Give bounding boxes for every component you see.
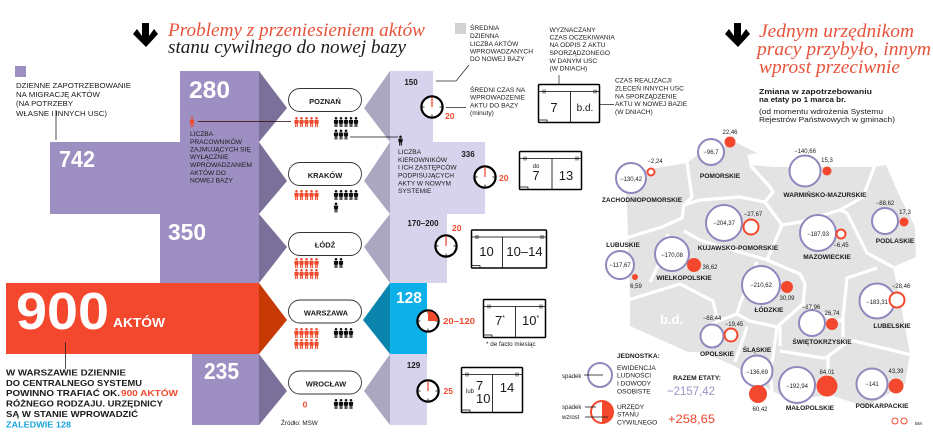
labels: regions: ŚLĄSKIE — [743, 345, 772, 354]
annotation: managers count — [350, 136, 457, 195]
legend: daily average entries: WPROWADZANYCH — [470, 48, 533, 56]
calendar: Łódź: 10 — [479, 244, 494, 259]
labels: regions: POMORSKIE — [700, 173, 741, 180]
panel: blue Warsaw block — [363, 283, 427, 354]
annotation: managers count: AKTY W NOWYM — [398, 180, 451, 188]
value: 280: 280 — [189, 77, 230, 104]
values: map numbers: 15,3 — [821, 158, 833, 164]
labels: regions: OPOLSKIE — [700, 351, 735, 358]
legend: map units: EWIDENCJA — [617, 365, 656, 372]
credits — [892, 418, 922, 426]
row: Kraków: 20 — [499, 173, 509, 183]
title: one clerk — [755, 21, 931, 78]
callout: Warsaw text: ZALEDWIE 128 — [6, 420, 71, 430]
values: map numbers: 36,62 — [702, 265, 718, 271]
callout: Warsaw text: 900 AKTÓW — [121, 387, 178, 398]
legend: map units: JEDNOSTKA: — [617, 353, 660, 360]
source: Źródło: MSW — [281, 418, 318, 427]
annotation: number of staff: WYŁĄCZNIE — [190, 154, 229, 161]
calendar: Poznań — [538, 84, 600, 122]
legend: daily average entries: LICZBA AKTÓW — [470, 39, 519, 48]
values: map numbers: −2,24 — [647, 159, 663, 165]
value: 350: 350 — [168, 219, 206, 245]
legend: daily average entries: DZIENNA — [470, 33, 500, 40]
legend: completion time — [593, 78, 688, 116]
subtitle: staffing change: Zmiana w zapotrzebowaniu — [759, 87, 872, 96]
legend: completion time: ZLECEŃ INNYCH USC — [615, 84, 684, 92]
panel: left purple demand blocks — [50, 71, 287, 425]
icon: down arrow right — [725, 23, 750, 47]
panel: right lilac entry blocks — [364, 71, 485, 425]
totals — [667, 375, 721, 426]
values: map numbers: 43,39 — [888, 369, 904, 375]
calendar: Wrocław: 7 — [476, 378, 483, 393]
legend: waiting time: NA ODPIS Z AKTU — [550, 42, 606, 49]
legend: daily demand: DZIENNE ZAPOTRZEBOWANIE — [16, 83, 131, 90]
legend: daily demand: (NA POTRZEBY — [16, 101, 73, 108]
values: map numbers: −170,08 — [661, 253, 684, 259]
values: map numbers: −117,67 — [609, 263, 631, 269]
value: 742: 742 — [59, 146, 95, 172]
totals: +258,65 — [668, 412, 715, 426]
labels: regions: MAŁOPOLSKIE — [786, 405, 835, 412]
panel: red Warsaw block: 900 — [16, 283, 109, 341]
row: Poznań: POZNAŃ — [309, 97, 341, 106]
calendar: Wrocław: lub — [466, 389, 475, 395]
callout: Warsaw text: RÓŻNEGO RODZAJU. URZĘDNICY — [6, 398, 163, 408]
values: map numbers: −183,31 — [866, 300, 889, 306]
calendar: Wrocław: 14 — [500, 380, 514, 395]
calendar: Wrocław: 10 — [476, 391, 490, 406]
callout: Warsaw text: DO CENTRALNEGO SYSTEMU — [6, 378, 142, 388]
values: map numbers: −68,44 — [703, 316, 722, 322]
bubbles: registry offices rings — [648, 168, 904, 342]
annotation: number of staff: LICZBA — [190, 131, 214, 138]
labels: regions: ŁÓDZKIE — [755, 305, 784, 314]
legend: map units: STANU — [617, 412, 639, 418]
calendar: Warszawa: 7 — [495, 313, 502, 328]
calendar: Warszawa — [484, 300, 546, 348]
legend: average entry time: WPROWADZENIE — [470, 94, 526, 102]
values: map numbers: −140,66 — [794, 149, 817, 155]
credits: BM — [915, 421, 922, 426]
labels: regions: ZACHODNIOPOMORSKIE — [602, 197, 683, 204]
calendar: Kraków: do — [533, 164, 540, 170]
title: one clerk: Jednym urzędnikom — [759, 21, 914, 42]
title: problems — [167, 20, 425, 58]
legend: waiting time: (W DNIACH) — [550, 66, 587, 72]
title: one clerk: wprost przeciwnie — [759, 57, 900, 78]
bubbles: registry offices filled — [632, 136, 908, 403]
labels: regions — [602, 173, 915, 412]
calendar: Warszawa: * — [536, 315, 539, 322]
annotation: number of staff — [190, 117, 291, 184]
legend: daily average entries: DO NOWEJ BAZY — [470, 56, 525, 63]
row: Wrocław — [288, 361, 453, 410]
legend: map units: CYWILNEGO — [617, 420, 657, 426]
values: map numbers: −88,62 — [876, 201, 895, 207]
values: map numbers: 60,42 — [752, 407, 768, 413]
values: map numbers: 30,09 — [779, 296, 795, 302]
legend: daily average entries — [455, 23, 533, 63]
callout: Warsaw text: W WARSZAWIE DZIENNIE — [6, 368, 126, 378]
row: Poznań: 20 — [445, 111, 455, 121]
subtitle: staffing change — [759, 87, 895, 124]
legend: average entry time: AKTU DO BAZY — [470, 102, 519, 110]
row: Kraków: KRAKÓW — [308, 171, 343, 180]
calendar: Kraków — [520, 152, 582, 190]
row: Kraków — [288, 150, 509, 212]
row: Łódź: 20 — [452, 223, 462, 233]
callout: Warsaw text: SĄ W STANIE WPROWADZIĆ — [6, 408, 138, 419]
title: problems: Problemy z przeniesieniem aktów — [167, 20, 425, 41]
calendar: Kraków: 7 — [532, 168, 540, 183]
values: map numbers: −136,69 — [746, 370, 769, 376]
legend: waiting time: WYZNACZANY — [550, 27, 596, 34]
legend: daily demand — [15, 66, 131, 140]
legend: daily demand: NA MIGRACJĘ AKTÓW — [16, 90, 100, 99]
row: Poznań — [288, 65, 469, 140]
legend: completion time: CZAS REALIZACJI — [615, 78, 672, 84]
values: map numbers: −19,45 — [725, 322, 744, 328]
map: Poland regions — [626, 143, 916, 407]
labels: regions: ŚWIĘTOKRZYSKIE — [792, 337, 852, 346]
legend: map units: I DOWODY — [617, 380, 652, 388]
calendar: Łódź — [472, 230, 546, 268]
legend: map units: LUDNOŚCI — [617, 370, 651, 380]
labels: regions: MAZOWIECKIE — [803, 254, 851, 261]
legend: average entry time — [470, 85, 526, 117]
values: map numbers: −87,96 — [802, 305, 821, 311]
annotation: number of staff: ZAJMUJĄCYCH SIĘ — [190, 146, 251, 154]
values: map numbers: −192,94 — [786, 384, 809, 390]
labels: regions: WARMIŃSKO-MAZURSKIE — [783, 190, 867, 199]
calendar: Poznań: b.d. — [577, 103, 593, 114]
subtitle: staffing change: (od momentu wdrożenia Systemu — [759, 107, 883, 116]
legend: map units: spadek — [562, 405, 582, 411]
totals: −2157,42 — [667, 384, 715, 398]
legend: waiting time: SPORZĄDZONEGO — [550, 50, 610, 57]
labels: regions: KUJAWSKO-POMORSKIE — [698, 245, 779, 252]
annotation: number of staff: AKTÓW DO — [190, 168, 226, 177]
row: Warszawa — [288, 300, 475, 349]
label: b.d.: b.d. — [660, 312, 683, 327]
row: Łódź: 170–200 — [407, 219, 439, 228]
values: map numbers: −141 — [865, 382, 879, 388]
annotation: number of staff: NOWEJ BAZY — [190, 178, 233, 184]
legend: daily average entries: ŚREDNIA — [470, 23, 500, 32]
callout: Warsaw text — [6, 342, 178, 430]
legend: completion time: NA SPORZĄDZENIE — [615, 94, 678, 100]
values: map numbers: 6,59 — [630, 284, 642, 290]
legend: map units — [561, 353, 660, 426]
legend: map units: URZĘDY — [617, 404, 645, 411]
calendar: Warszawa: * de facto miesiąc — [486, 341, 536, 348]
panel: red Warsaw block — [6, 283, 287, 354]
values: map numbers: −28,46 — [892, 284, 911, 290]
calendar: Wrocław — [462, 368, 522, 412]
row: Poznań: 150 — [404, 78, 418, 87]
legend: average entry time: ŚREDNI CZAS NA — [470, 85, 526, 94]
calendar: Warszawa: 10 — [522, 313, 536, 328]
calendar: Kraków: 13 — [559, 168, 573, 183]
values: map numbers: −204,37 — [713, 221, 736, 227]
legend: completion time: AKTU W NOWEJ BAZIE — [615, 101, 688, 108]
labels: regions: PODKARPACKIE — [856, 403, 909, 410]
row: Wrocław: WROCŁAW — [306, 380, 347, 388]
labels: regions: LUBELSKIE — [873, 323, 911, 330]
values: map numbers: 17,3 — [899, 210, 911, 216]
title: one clerk: pracy przybyło, innym — [755, 39, 931, 60]
row: Wrocław: 0 — [303, 400, 308, 410]
legend: average entry time: (minuty) — [470, 110, 494, 117]
labels: regions: PODLASKIE — [876, 238, 915, 245]
values: map numbers — [609, 130, 911, 413]
legend: waiting time: W DANYM USC — [550, 58, 597, 65]
labels: regions: WIELKOPOLSKIE — [656, 275, 712, 282]
subtitle: staffing change: Rejestrów Państwowych w gminach) — [759, 115, 895, 124]
annotation: managers count: KIEROWNIKÓW — [398, 155, 448, 164]
legend: waiting time: CZAS OCZEKIWANIA — [550, 34, 615, 42]
row: Warszawa: WARSZAWA — [304, 308, 349, 318]
annotation: managers count: SYSTEMIE — [398, 188, 432, 195]
row: Wrocław: 25 — [444, 386, 453, 396]
values: map numbers: 22,46 — [722, 130, 738, 136]
row: Kraków: 336 — [461, 150, 475, 159]
legend: map units: OSOBISTE — [617, 388, 651, 396]
title: problems: stanu cywilnego do nowej bazy — [168, 37, 407, 58]
annotation: number of staff: PRACOWNIKÓW — [190, 137, 243, 146]
annotation: managers count: I ICH ZASTĘPCÓW — [398, 162, 457, 172]
values: map numbers: 26,74 — [824, 311, 840, 317]
panel: blue Warsaw block: 128 — [396, 290, 422, 307]
row: Warszawa: 20–120 — [443, 316, 475, 326]
calendar: Łódź: 10–14 — [506, 244, 543, 259]
callout: Warsaw text: POWINNO TRAFIAĆ OK. — [6, 387, 120, 398]
values: map numbers: −130,42 — [620, 177, 643, 183]
values: map numbers: −210,62 — [750, 283, 773, 289]
legend: map units: spadek — [562, 374, 582, 380]
annotation: managers count: PODPISUJĄCYCH — [398, 172, 454, 180]
values: map numbers: 84,01 — [819, 370, 835, 376]
bubbles: staffing change purple — [606, 139, 898, 403]
row: Wrocław: 129 — [407, 361, 421, 370]
annotation: managers count: LICZBA — [398, 149, 422, 156]
calendar: Poznań: 7 — [550, 100, 558, 115]
totals: RAZEM ETATY: — [673, 375, 721, 382]
calendar: Warszawa: * — [502, 315, 505, 322]
legend: waiting time — [550, 27, 615, 96]
icon: down arrow left — [133, 23, 158, 47]
panel: red Warsaw block: AKTÓW — [113, 315, 166, 330]
row: Łódź — [288, 219, 462, 279]
value: 235: 235 — [204, 358, 239, 384]
values: map numbers: −27,67 — [744, 212, 763, 218]
annotation: number of staff: WPROWADZANIEM — [190, 162, 252, 169]
legend: daily demand: WŁASNE I INNYCH USC) — [16, 111, 107, 118]
labels: regions: LUBUSKIE — [606, 242, 640, 249]
values: map numbers: −187,93 — [807, 232, 830, 238]
legend: completion time: (W DNIACH) — [615, 109, 653, 116]
values: map numbers: −96,7 — [703, 150, 719, 156]
subtitle: staffing change: na etaty po 1 marca br. — [759, 95, 846, 104]
row: Łódź: ŁÓDŹ — [315, 240, 336, 250]
values: map numbers: −6,45 — [833, 243, 849, 249]
legend: map units: wzrost — [561, 415, 580, 421]
